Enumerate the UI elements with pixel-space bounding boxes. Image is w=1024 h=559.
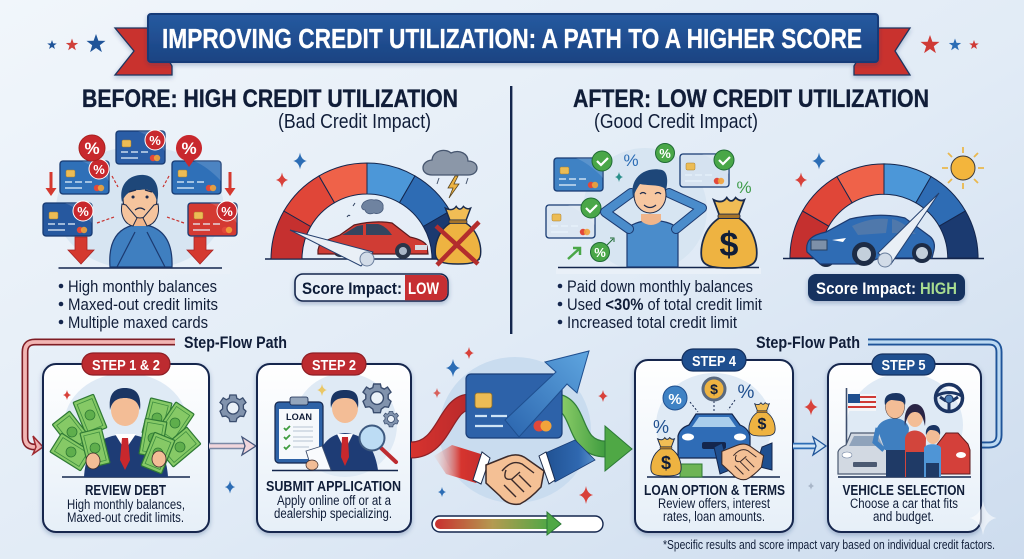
card description: and budget. (873, 509, 934, 524)
sparkles between cards (804, 398, 818, 490)
card description: High monthly balances, (67, 497, 185, 512)
red ribbon (411, 402, 470, 450)
pill: STEP 4 (692, 353, 737, 370)
card title: VEHICLE SELECTION (842, 483, 965, 499)
bullet list: before: Maxed-out credit limits (68, 295, 218, 314)
step card 1 (43, 353, 209, 532)
needle high (878, 193, 939, 267)
handshake (434, 440, 595, 504)
money bags and cash: $ (758, 416, 767, 433)
pill (82, 353, 170, 375)
flow path: right blue (868, 342, 999, 445)
card description (658, 496, 770, 524)
flow label left: Step-Flow Path (184, 334, 287, 352)
bullet list: after: Increased total credit limit (567, 313, 737, 332)
arrow: step 1 to step 2 (209, 437, 256, 455)
card: light lower with check (546, 198, 601, 238)
child (924, 425, 941, 477)
money bags and cash (651, 403, 775, 477)
clipboard loan: LOAN (286, 412, 312, 423)
blue up arrow (505, 351, 589, 437)
finance icons: % (668, 391, 682, 408)
pill (872, 354, 935, 375)
card description: Maxed-out credit limits. (67, 510, 184, 525)
decorative stars left (47, 34, 106, 52)
card title: REVIEW DEBT (85, 483, 166, 499)
card: blue with check (554, 151, 612, 191)
pill (682, 349, 746, 371)
green arrow (558, 402, 632, 471)
money bag with dollar (701, 198, 757, 268)
sparkles (795, 152, 826, 188)
sparkles (433, 347, 608, 504)
flow path: left red (25, 342, 175, 454)
bullet list: before (59, 277, 218, 332)
progress bar (432, 512, 603, 535)
card title: LOAN OPTION & TERMS (644, 483, 785, 499)
worried man (110, 175, 172, 267)
credit card (466, 374, 562, 438)
blue car (807, 215, 934, 267)
pill: STEP 2 (312, 357, 356, 374)
step card 2 (257, 353, 411, 532)
illustration: relaxed person with healthy cards (546, 144, 761, 274)
family (875, 393, 941, 477)
score pill: high: Score Impact: (816, 279, 916, 298)
percent symbols: % (623, 151, 639, 170)
bullet list: before: High monthly balances (68, 277, 217, 296)
down arrows (46, 172, 236, 264)
finance icons: % (738, 382, 755, 403)
card: upper left (60, 159, 109, 194)
card description (850, 496, 958, 524)
card description: rates, loan amounts. (663, 509, 765, 524)
badge: percent left (79, 135, 105, 161)
score pill: low: Score Impact: (302, 279, 402, 298)
central illustration: card, handshake, arrows (411, 347, 632, 504)
red car (318, 222, 428, 259)
woman (905, 404, 926, 477)
clipboard loan (275, 397, 323, 463)
card title: SUBMIT APPLICATION (266, 479, 401, 495)
sparkles (276, 152, 307, 188)
money bags and cash: $ (661, 453, 671, 473)
bullet list: after: Paid down monthly balances (567, 277, 753, 296)
pill: STEP 1 & 2 (92, 357, 160, 374)
needle low (290, 230, 374, 266)
agent person (306, 390, 378, 470)
card description (274, 493, 392, 521)
title text: IMPROVING CREDIT UTILIZATION: A PATH TO A HIGHER SCORE (162, 23, 862, 54)
smoke puff (347, 200, 383, 217)
score pill: low (295, 274, 448, 301)
bullet list: after (558, 277, 762, 332)
badge: percent left: % (84, 139, 100, 158)
arrow: step 4 to step 5 (793, 437, 826, 455)
person with cash (50, 388, 201, 477)
flow label right: Step-Flow Path (756, 334, 860, 352)
percent symbols: % (594, 245, 606, 260)
card: light with check (680, 150, 734, 187)
bullet list: before: Multiple maxed cards (68, 313, 208, 332)
relaxed man (605, 169, 702, 267)
card: top centre (116, 130, 165, 164)
bullet list: after: Used <30% of total credit limit (567, 295, 762, 314)
heading: before: BEFORE: HIGH CREDIT UTILIZATION (82, 85, 458, 113)
card: lower right red (188, 201, 237, 236)
badge: percent right: % (181, 139, 197, 158)
score pill: high: HIGH (920, 279, 957, 298)
crossed-out money bag (435, 206, 481, 265)
score pill: low: LOW (408, 279, 440, 298)
gauge: before low score (265, 150, 481, 266)
banner bar (148, 14, 878, 62)
score pill: high (808, 274, 965, 301)
card: lower left: % (77, 204, 89, 219)
steering wheel (936, 384, 962, 412)
subheading: before: (Bad Credit Impact) (278, 111, 431, 133)
watermark sparkle (969, 501, 997, 535)
icon: gear between steps (220, 395, 246, 422)
card: top centre: % (149, 133, 161, 148)
pill (302, 353, 366, 375)
front-view car (678, 414, 750, 458)
finance icons (653, 378, 755, 437)
card description: Choose a car that fits (850, 496, 958, 511)
subheading: after: (Good Credit Impact) (594, 111, 758, 133)
card description: Apply online off or at a (277, 493, 391, 508)
ribbon: left tail (115, 28, 172, 75)
card description: dealership specializing. (274, 506, 392, 521)
ribbon: right tail (854, 28, 910, 75)
percent symbols: % (736, 178, 752, 197)
step card 5 (828, 354, 981, 532)
gauge: after high score (783, 147, 984, 267)
card: lower right red: % (221, 204, 233, 219)
illustration: stressed person with maxed cards (43, 130, 237, 274)
card: lower left (43, 201, 93, 236)
heading: after: AFTER: LOW CREDIT UTILIZATION (573, 85, 929, 113)
pill: STEP 5 (882, 357, 926, 374)
card description (67, 497, 185, 525)
decorative stars right (920, 35, 979, 53)
sun (942, 147, 984, 189)
storm cloud (423, 150, 477, 198)
flag (846, 388, 876, 470)
money bag with dollar: $ (720, 226, 739, 264)
man (875, 393, 909, 477)
finance icons: $ (710, 381, 718, 397)
card: upper left: % (93, 162, 105, 177)
card description: Review offers, interest (658, 496, 770, 511)
percent symbols (568, 144, 752, 262)
percent symbols: % (659, 146, 671, 161)
sparkle between steps (225, 480, 235, 494)
finance icons: % (653, 417, 669, 437)
small handshake (714, 443, 772, 480)
gears (317, 384, 398, 427)
step card 4 (635, 349, 793, 532)
title banner (115, 14, 910, 75)
badge: percent right (176, 135, 202, 167)
parked cars (838, 433, 970, 474)
magnifier (360, 426, 396, 462)
card: upper right (172, 161, 221, 194)
